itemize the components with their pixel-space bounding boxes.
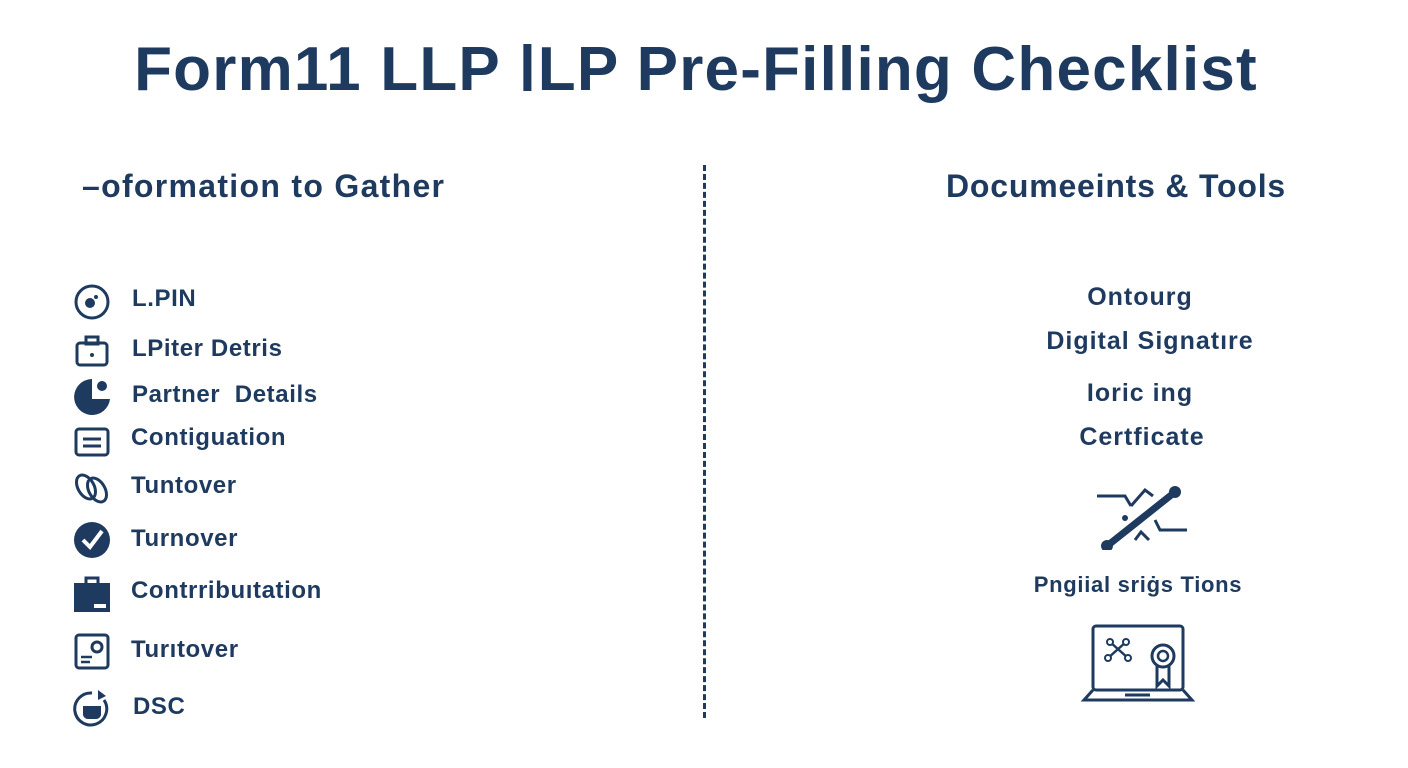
icon: bag (74, 576, 110, 612)
icon: target (74, 284, 110, 320)
heading: documents & tools: Documeeints & Tools (946, 168, 1286, 204)
icon: card (74, 428, 110, 456)
icon: refresh (73, 690, 108, 726)
icon: id card (74, 634, 110, 670)
text: DSC: DSC (133, 693, 185, 720)
text: Digital Signature: Digital Signatıre (1046, 327, 1254, 355)
text: Contrribuitation: Contrribuıtation (131, 577, 322, 604)
text: Tuntover: Tuntover (131, 472, 237, 499)
text: Ontourg: Ontourg (1087, 283, 1193, 311)
icon: laptop certificate (1080, 624, 1195, 702)
text: L.PIN: L.PIN (132, 285, 196, 312)
text: Ioric ing: Ioric ing (1087, 379, 1193, 407)
panel: documents & tools (1034, 283, 1254, 702)
divider (703, 165, 706, 718)
text: Certficate: Certficate (1079, 423, 1205, 451)
text: Turitover: Turıtover (131, 636, 239, 663)
icon: pie (74, 379, 110, 415)
text: Contiguation: Contiguation (131, 424, 286, 451)
icon: links (75, 474, 108, 504)
icon: briefcase (76, 336, 108, 366)
text: Turnover: Turnover (131, 525, 238, 552)
icon: check (74, 522, 110, 558)
title: Form11 LLP ⅠLP Pre-Filling Checklist (134, 35, 1258, 104)
text: Pngiial sriġs Tions: Pngiial sriġs Tions (1034, 572, 1242, 597)
text: Partner Details: Partner Details (132, 381, 318, 408)
panel: information list (73, 284, 322, 726)
text: LPiter Detris: LPiter Detris (132, 335, 283, 362)
icon: signature pen (1097, 486, 1187, 550)
heading: information to gather: –oformation to Gather (82, 168, 445, 204)
